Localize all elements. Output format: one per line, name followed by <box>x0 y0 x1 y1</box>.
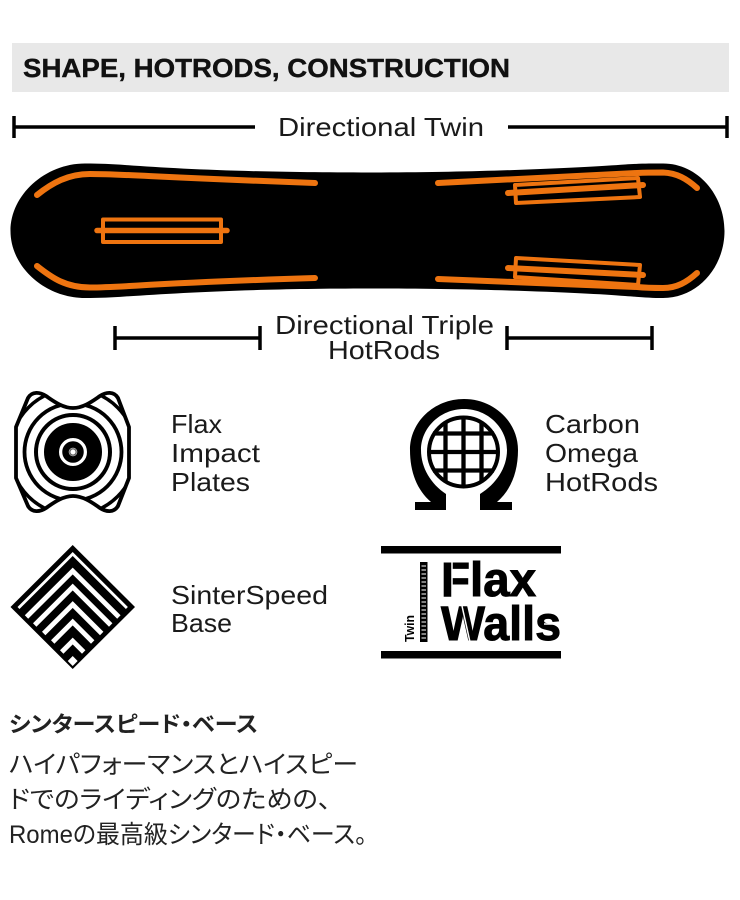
japanese description: ハイパフォーマンスとハイスピー <box>9 751 358 779</box>
dimension: directional twin: Directional Twin <box>278 112 484 142</box>
label: sinterspeed base: Base <box>171 608 232 638</box>
label: sinterspeed base: SinterSpeed <box>171 580 328 610</box>
label: flax impact plates: Impact <box>171 438 261 468</box>
japanese description: Romeの最高級シンタード・ベース。 <box>9 821 367 849</box>
orange hotrods <box>37 172 697 288</box>
japanese description: ドでのライディングのための、 <box>9 786 331 814</box>
dimension: directional twin <box>14 112 727 142</box>
icon: twin flax walls logo <box>381 546 562 658</box>
label: carbon omega hotrods <box>545 409 658 497</box>
dimension: directional triple hotrods: Directional Triple <box>275 310 494 340</box>
icon: twin flax walls logo: Flax <box>441 554 536 607</box>
label: flax impact plates: Plates <box>171 467 250 497</box>
heading band <box>12 43 729 92</box>
dimension: directional triple hotrods <box>115 310 652 365</box>
icon: twin flax walls logo: Walls <box>441 598 561 651</box>
board silhouette <box>10 164 724 298</box>
label: flax impact plates: Flax <box>171 409 222 439</box>
japanese description <box>9 751 367 849</box>
label: carbon omega hotrods: HotRods <box>545 467 658 497</box>
label: flax impact plates <box>171 409 261 497</box>
label: carbon omega hotrods: Omega <box>545 438 639 468</box>
label: sinterspeed base <box>171 580 328 638</box>
heading band: SHAPE, HOTRODS, CONSTRUCTION <box>23 53 510 83</box>
icon: sinterspeed base <box>10 545 135 669</box>
dimension: directional triple hotrods: HotRods <box>328 335 440 365</box>
icon: flax impact plates <box>14 391 131 513</box>
icon: carbon omega hotrods <box>410 399 518 510</box>
label: carbon omega hotrods: Carbon <box>545 409 640 439</box>
japanese subheading: シンタースピード・ベース <box>9 712 258 737</box>
snowboard diagram <box>10 164 724 298</box>
icon: twin flax walls logo: Twin <box>402 615 417 642</box>
